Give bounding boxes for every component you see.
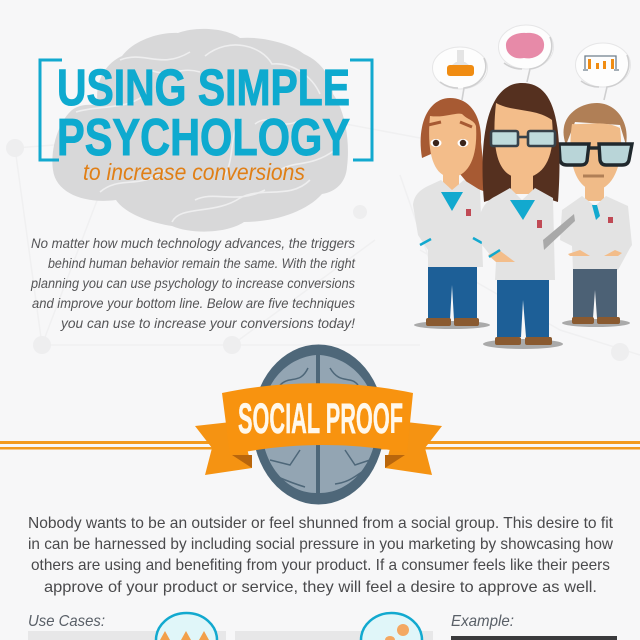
title bracket: right <box>350 60 372 160</box>
subtitle: to increase conversions <box>83 159 305 185</box>
section description <box>28 515 614 596</box>
intro text block: No matter how much technology advances, the triggers <box>31 235 355 251</box>
background network pattern <box>6 123 640 361</box>
centre woman's glasses <box>491 131 555 146</box>
badge: social proof <box>195 344 442 504</box>
example heading: Example: <box>451 613 514 630</box>
intro text block: behind human behavior remain the same. With the right <box>48 255 356 271</box>
use cases heading: Use Cases: <box>28 613 105 630</box>
panel: use case two <box>235 613 433 640</box>
intro text block: planning you can use psychology to increase conversions <box>30 275 355 291</box>
character: woman left <box>413 98 490 329</box>
intro text block <box>30 235 356 331</box>
title line one: USING SIMPLE <box>57 59 350 116</box>
section description: Nobody wants to be an outsider or feel shunned from a social group. This desire to fit <box>28 515 614 532</box>
title line two: PSYCHOLOGY <box>57 109 350 167</box>
brain illustration behind title <box>52 29 348 232</box>
intro text block: you can use to increase your conversions today! <box>60 315 355 331</box>
panel: use case one <box>28 613 226 640</box>
section description: approve of your product or service, they will feel a desire to approve as well. <box>44 579 597 596</box>
title <box>40 59 372 185</box>
panel: example <box>451 636 617 640</box>
title bracket: left <box>40 60 62 160</box>
section description: others are using and benefiting from your product. If a consumer feels like their peers <box>31 557 610 574</box>
section description: in can be harnessed by including social pressure in you marketing by showcasing how <box>28 536 614 553</box>
character: woman centre <box>480 83 575 349</box>
section divider lines <box>0 441 640 450</box>
character: man right <box>559 103 632 327</box>
ribbon tails <box>195 421 252 475</box>
man's glasses <box>559 144 632 165</box>
badge title: SOCIAL PROOF <box>238 395 403 443</box>
icon: test tubes speech bubble <box>576 43 630 100</box>
icon: brain speech bubble <box>498 25 554 82</box>
badge brain circle <box>252 344 384 504</box>
ribbon band <box>222 383 413 455</box>
icon: flask speech bubble <box>432 47 488 100</box>
intro text block: and improve your bottom line. Below are five techniques <box>32 295 355 311</box>
